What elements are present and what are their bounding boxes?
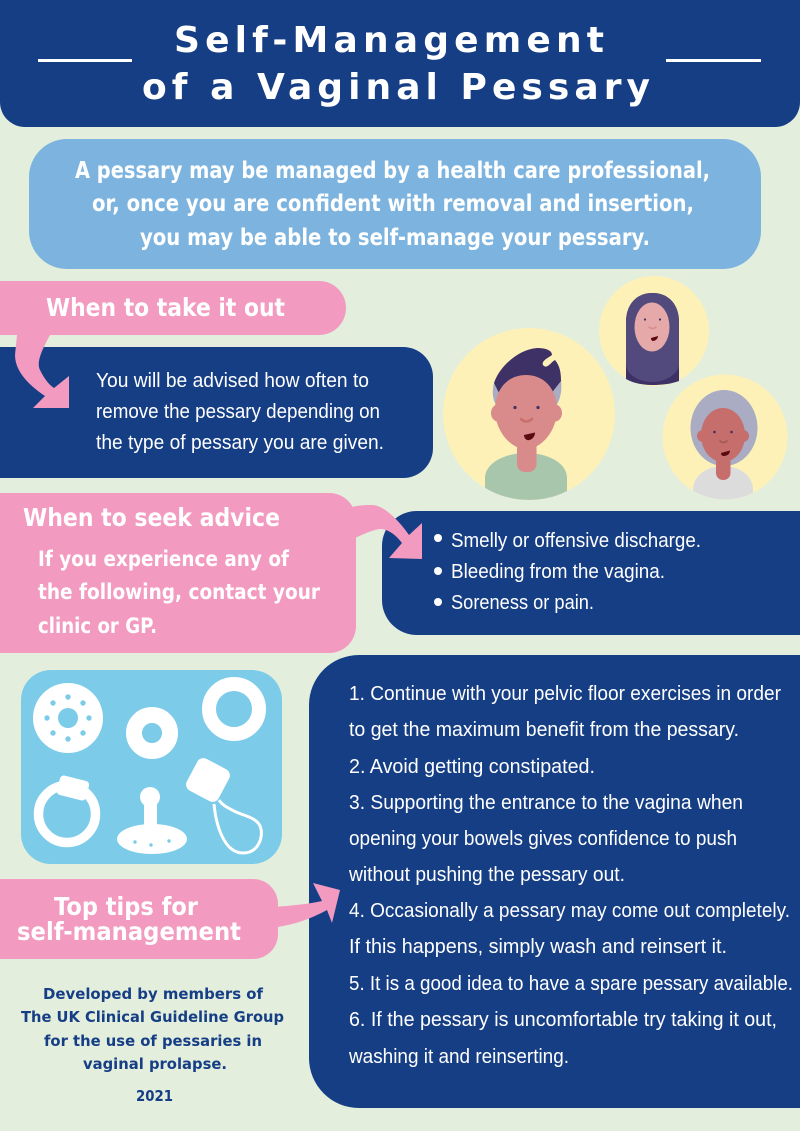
panel: top tips text: 2. Avoid getting constipated. xyxy=(349,756,595,778)
panel: symptoms list: Bleeding from the vagina. xyxy=(451,561,665,583)
panel: introduction: you may be able to self-manage your pessary. xyxy=(140,225,650,251)
icon: perforated disc pessary xyxy=(33,683,103,753)
text: contact clinic: If you experience any of xyxy=(38,547,290,571)
arrow: top tips xyxy=(270,883,340,928)
panel: top tips text: washing it and reinserting. xyxy=(348,1046,569,1068)
panel: top tips text: without pushing the pessary out. xyxy=(348,864,625,886)
icon: donut pessary xyxy=(134,715,170,751)
arrow: seek advice xyxy=(345,505,422,559)
icon: cube pessary xyxy=(184,756,261,853)
text: contact clinic: the following, contact your xyxy=(38,580,321,604)
text: contact clinic xyxy=(38,547,321,638)
panel: introduction: or, once you are confident with removal and insertion, xyxy=(92,191,694,217)
panel: introduction xyxy=(29,139,761,269)
panel: top tips text: 4. Occasionally a pessary may come out completely. xyxy=(349,900,790,922)
illustration: woman in hijab xyxy=(599,276,709,386)
arrow: take it out xyxy=(15,335,69,408)
heading: top tips: self-management xyxy=(17,917,241,946)
title: Self-Management xyxy=(174,20,604,61)
heading: top tips xyxy=(17,892,241,946)
panel: top tips text: 1. Continue with your pelvic floor exercises in order xyxy=(349,683,781,705)
illustration: older woman xyxy=(662,374,788,510)
text: removal advice: remove the pessary depending on xyxy=(96,401,380,423)
text: credits: vaginal prolapse. xyxy=(83,1055,227,1073)
illustration: man xyxy=(443,328,615,510)
text: credits xyxy=(21,985,284,1105)
text: credits: for the use of pessaries in xyxy=(44,1032,262,1050)
panel: top tips text: to get the maximum benefit from the pessary. xyxy=(349,719,739,741)
panel: symptoms list: Soreness or pain. xyxy=(451,592,594,614)
panel: when to seek advice xyxy=(0,493,422,653)
text: removal advice xyxy=(96,370,384,454)
panel: pessary types xyxy=(21,670,282,864)
panel: symptoms list: Smelly or offensive discharge. xyxy=(451,530,701,552)
heading: when to seek advice: When to seek advice xyxy=(23,503,280,532)
panel: top tips text xyxy=(309,655,800,1108)
header banner xyxy=(0,0,800,127)
heading: top tips: Top tips for xyxy=(54,892,199,921)
text: credits: 2021 xyxy=(136,1087,173,1105)
panel: top tips text: 3. Supporting the entrance to the vagina when xyxy=(349,792,743,814)
text: credits: The UK Clinical Guideline Group xyxy=(21,1008,284,1026)
panel: top tips text: opening your bowels gives confidence to push xyxy=(349,828,737,850)
callout: top tips for self-management xyxy=(0,879,340,959)
panel: when to take it out xyxy=(0,281,433,478)
text: contact clinic: clinic or GP. xyxy=(38,614,157,638)
icon: gellhorn pessary xyxy=(117,787,187,854)
text: removal advice: You will be advised how often to xyxy=(96,370,369,392)
icon: ring with support pessary xyxy=(38,775,96,842)
text: credits: Developed by members of xyxy=(43,985,263,1003)
icon: ring pessary xyxy=(209,684,259,734)
text: removal advice: the type of pessary you are given. xyxy=(96,432,384,454)
panel: top tips text: If this happens, simply wash and reinsert it. xyxy=(349,936,727,958)
panel: top tips text: 6. If the pessary is uncomfortable try taking it out, xyxy=(349,1009,777,1031)
panel: symptoms list xyxy=(382,511,800,635)
heading: when to take it out: When to take it out xyxy=(46,293,285,322)
title: of a Vaginal Pessary xyxy=(142,67,650,108)
title xyxy=(142,20,650,108)
